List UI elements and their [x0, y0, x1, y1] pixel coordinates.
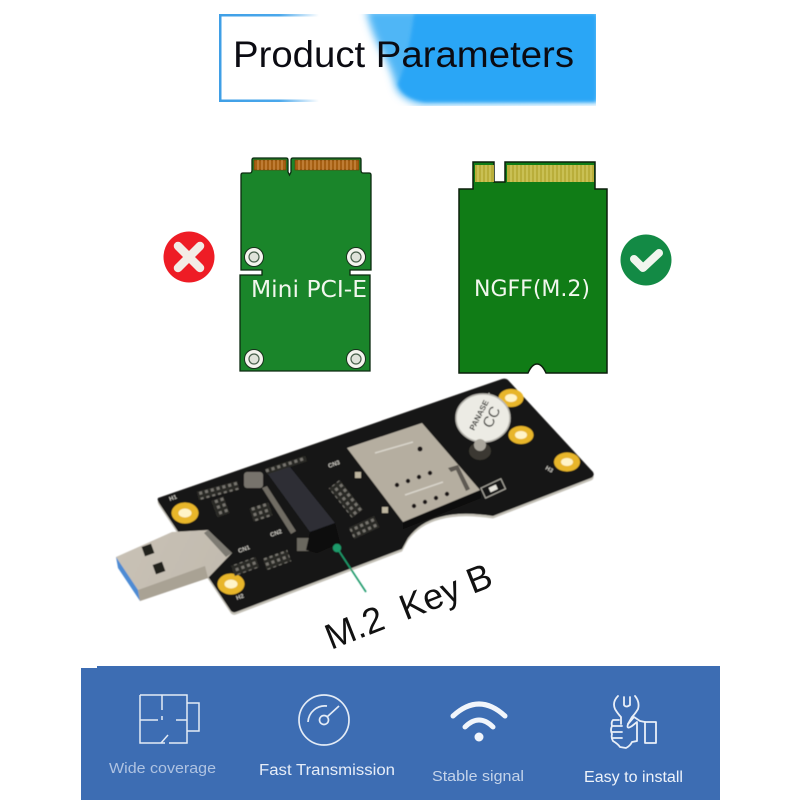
card outline — [240, 158, 371, 371]
feature: fast transmission: Fast Transmission — [259, 762, 395, 779]
icon: gauge — [299, 695, 349, 745]
feature: fast transmission — [259, 695, 395, 779]
silkscreen labels: H2 — [236, 593, 246, 602]
gold contacts — [254, 160, 359, 170]
title text: Product Parameters — [233, 34, 574, 75]
blue brush wash — [366, 10, 600, 104]
board — [158, 379, 594, 612]
mounting holes — [172, 389, 580, 594]
card body — [459, 162, 607, 373]
infographic canvas — [81, 14, 720, 800]
coin cell — [456, 394, 510, 442]
USB plug — [116, 530, 232, 601]
NGFF M.2 card — [459, 162, 607, 373]
small components — [197, 456, 506, 576]
board edge — [158, 381, 594, 615]
card label: NGFF(M.2) — [474, 277, 590, 302]
callout leader line — [333, 544, 366, 592]
icon: wifi — [453, 704, 505, 740]
icon: floor plan — [140, 695, 199, 743]
feature: wide coverage: Wide coverage — [109, 760, 216, 777]
silkscreen labels: H1 — [169, 494, 179, 503]
card label: Mini PCI-E — [251, 277, 367, 303]
feature: wide coverage — [109, 695, 216, 777]
feature: easy to install — [584, 696, 683, 786]
inductor — [244, 472, 263, 488]
button — [469, 439, 491, 460]
coin cell: PANASE — [468, 398, 491, 432]
title banner — [219, 10, 600, 104]
feature: easy to install: Easy to install — [584, 769, 683, 786]
banner frame — [219, 14, 319, 102]
feature: stable signal — [432, 704, 524, 785]
feature: stable signal: Stable signal — [432, 768, 524, 785]
icon: green check — [620, 234, 672, 286]
SIM slot — [347, 423, 481, 529]
gold contacts — [475, 165, 594, 182]
coin cell: CC — [479, 404, 504, 431]
silkscreen labels: CN1 — [238, 545, 252, 555]
silkscreen labels: CN2 — [270, 529, 284, 539]
M.2 socket — [262, 467, 340, 553]
silkscreen labels: H3 — [544, 466, 554, 475]
icon: wrench and hand — [611, 696, 656, 748]
features panel — [81, 666, 720, 800]
icon: red cross — [164, 232, 214, 282]
silkscreen labels: CN3 — [328, 460, 342, 470]
silkscreen labels: H4 — [483, 392, 493, 401]
callout text: M.2 Key B — [319, 555, 498, 657]
adapter board photo — [116, 379, 594, 615]
silkscreen labels — [169, 392, 554, 602]
Mini PCI-E card — [240, 158, 371, 371]
screw holes — [244, 248, 366, 368]
